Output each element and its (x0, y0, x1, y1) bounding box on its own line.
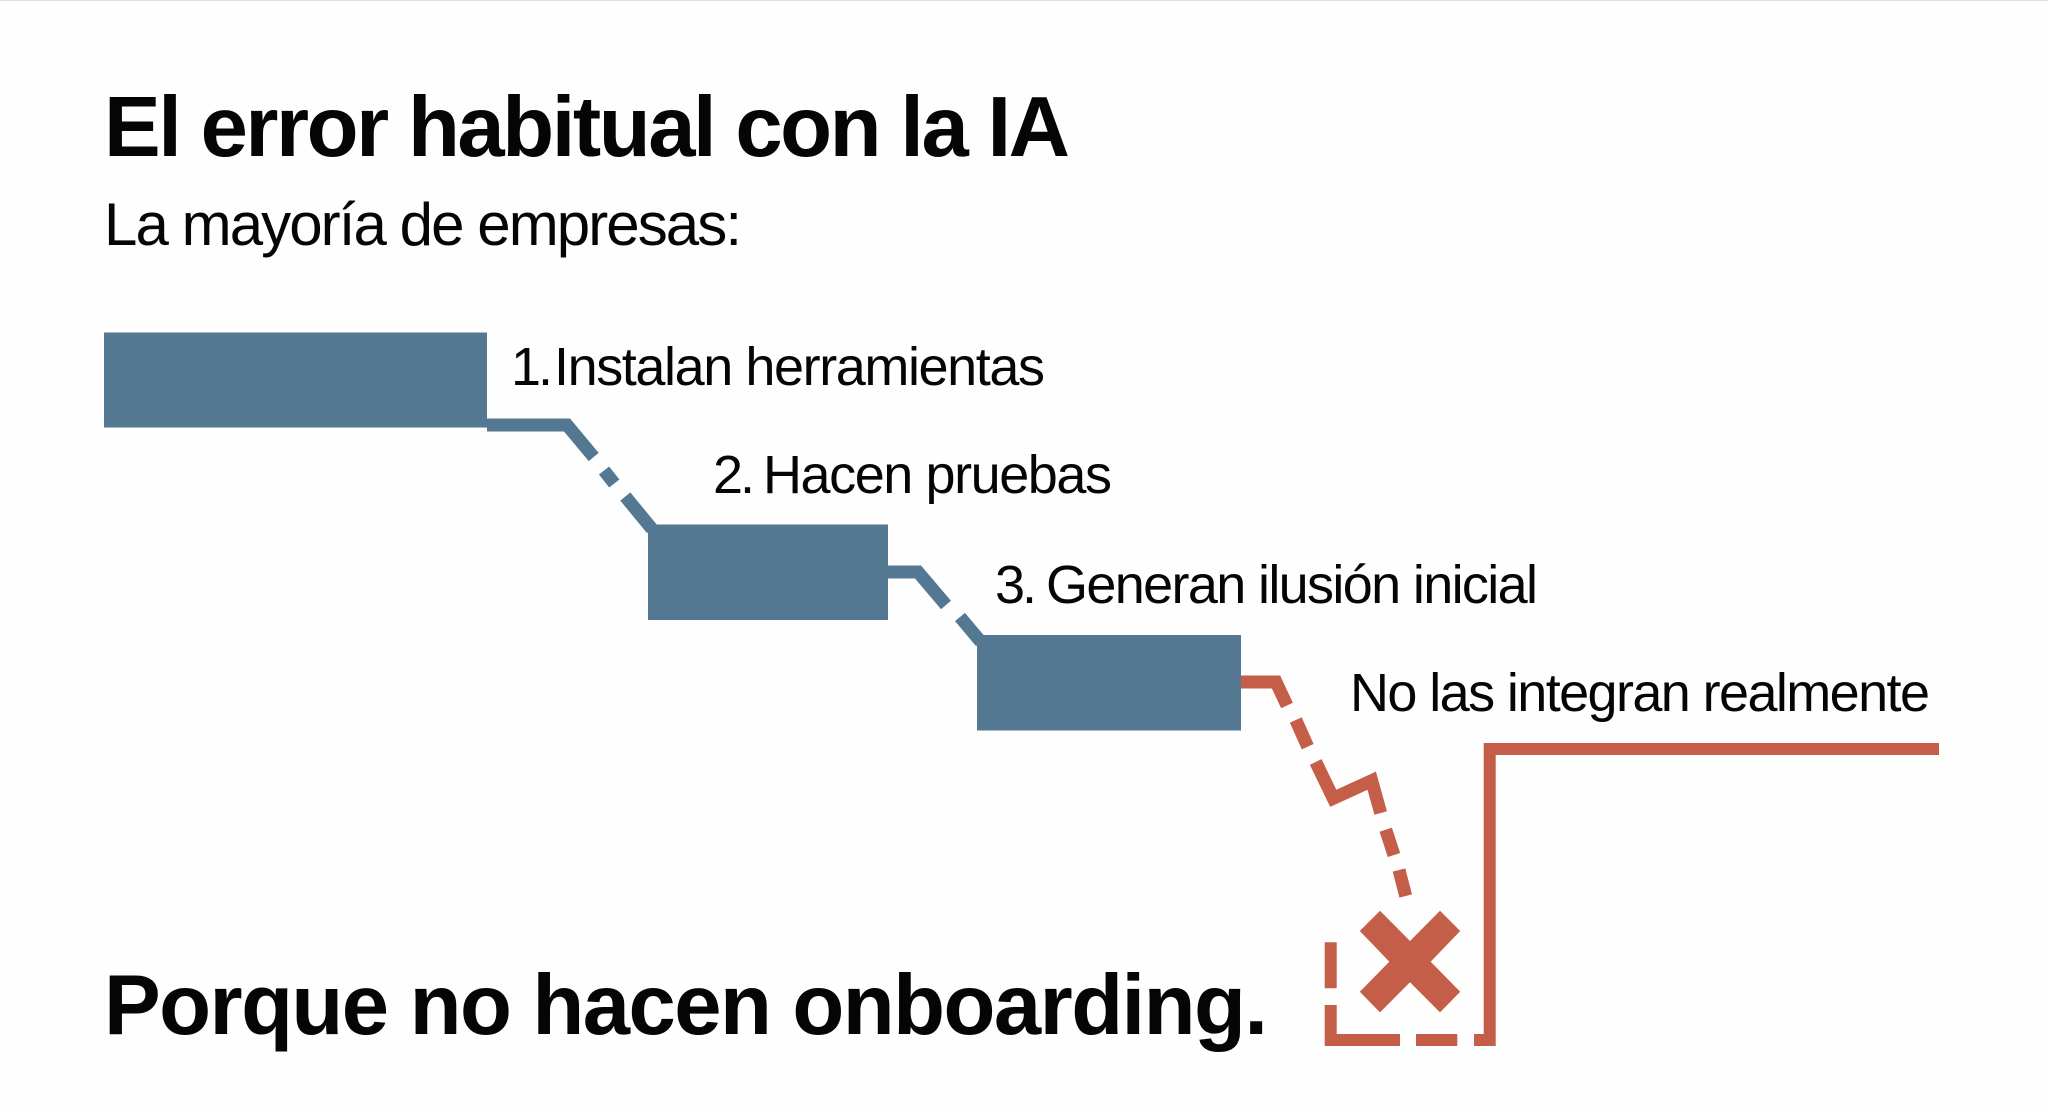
step 1 bar (104, 332, 487, 428)
title: El error habitual con la IA (104, 80, 1070, 175)
subtitle: La mayoría de empresas: (104, 191, 742, 258)
step 1 label: 1. (511, 337, 550, 397)
conclusion: Porque no hacen onboarding. (104, 958, 1268, 1053)
step 3 label: 3. (995, 555, 1037, 615)
step 2 bar (648, 524, 888, 620)
frame: dashed pit around the cross (1331, 942, 1457, 1040)
step 3 label: Generan ilusión inicial (1046, 555, 1538, 615)
connector: failing dashed path to the cross (1241, 682, 1406, 896)
step 3 bar (977, 635, 1241, 730)
step 2 label: Hacen pruebas (763, 445, 1112, 505)
connector: step 1 to step 2 (487, 425, 652, 529)
step 1 label: Instalan herramientas (554, 337, 1045, 397)
frame: step line rising from the pit (1474, 749, 1939, 1040)
icon: red cross (1360, 912, 1460, 1012)
connector: step 2 to step 3 (887, 572, 981, 642)
warning label: No las integran realmente (1350, 663, 1930, 723)
step 2 label: 2. (713, 445, 755, 505)
